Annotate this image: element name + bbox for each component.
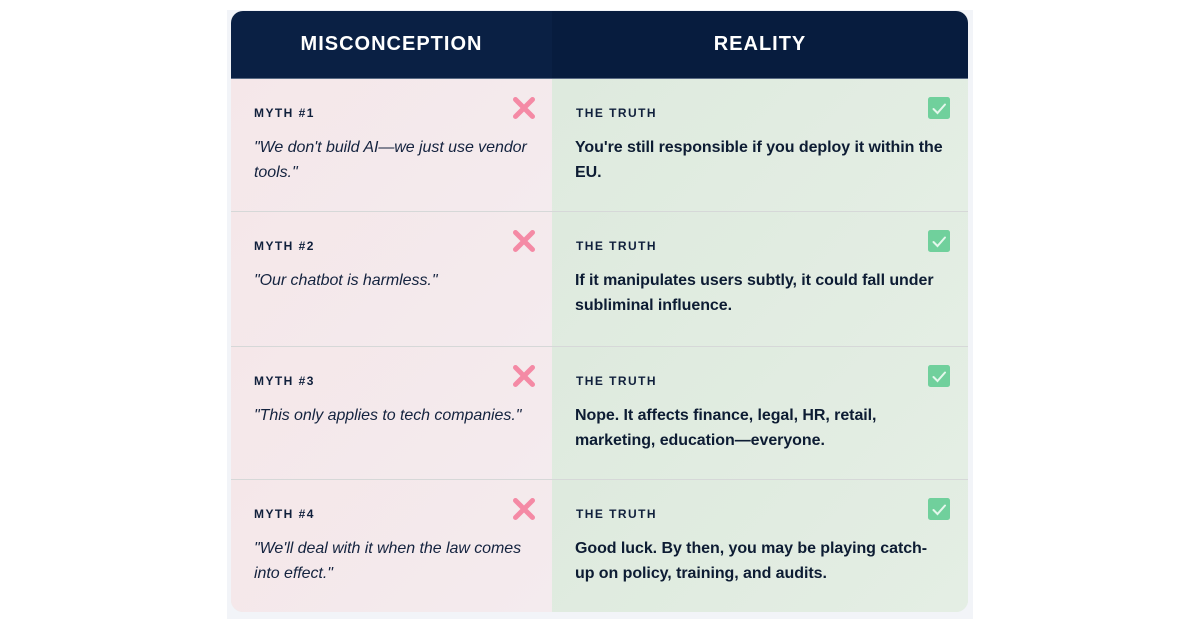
row 3 bbox=[231, 347, 968, 480]
heading: misconception: MISCONCEPTION bbox=[301, 33, 482, 55]
panel: myth 4 bbox=[231, 480, 552, 612]
myth label: MYTH #2 bbox=[254, 239, 315, 253]
icon: check bbox=[928, 230, 950, 252]
row 4 bbox=[231, 480, 950, 612]
truth text bbox=[575, 407, 876, 449]
truth text: Good luck. By then, you may be playing catch- bbox=[575, 540, 927, 557]
myth quote: "This only applies to tech companies." bbox=[254, 407, 521, 424]
header bar bbox=[231, 11, 968, 79]
page backdrop panel bbox=[227, 10, 973, 619]
truth label: THE TRUTH bbox=[576, 374, 657, 388]
comparison table bbox=[231, 11, 968, 612]
icon: check bbox=[928, 498, 950, 520]
panel: truth 2 bbox=[552, 212, 968, 347]
myth quote: "Our chatbot is harmless." bbox=[254, 272, 437, 289]
icon: cross bbox=[513, 97, 535, 119]
truth text: up on policy, training, and audits. bbox=[575, 565, 827, 582]
truth text: You're still responsible if you deploy it within the bbox=[575, 139, 943, 156]
icon: check bbox=[928, 97, 950, 119]
panel: truth 4 bbox=[552, 480, 968, 612]
myth quote bbox=[254, 139, 528, 181]
truth text: marketing, education—everyone. bbox=[575, 432, 825, 449]
truth text: EU. bbox=[575, 164, 602, 181]
truth text bbox=[575, 540, 927, 582]
truth text: subliminal influence. bbox=[575, 297, 732, 314]
heading: reality: REALITY bbox=[714, 33, 806, 55]
myth quote: "We don't build AI—we just use vendor bbox=[254, 139, 527, 156]
truth label: THE TRUTH bbox=[576, 507, 657, 521]
row 2 bbox=[231, 212, 968, 347]
myth label: MYTH #3 bbox=[254, 374, 315, 388]
truth text bbox=[575, 139, 943, 181]
panel: myth 1 bbox=[231, 79, 552, 212]
truth label: THE TRUTH bbox=[576, 239, 657, 253]
icon: cross bbox=[513, 230, 535, 252]
panel: myth 2 bbox=[231, 212, 552, 347]
myth quote: into effect." bbox=[254, 565, 333, 582]
myth quote: tools." bbox=[254, 164, 298, 181]
icon: cross bbox=[513, 498, 535, 520]
icon: cross bbox=[513, 365, 535, 387]
icon: check bbox=[928, 365, 950, 387]
panel: myth 3 bbox=[231, 347, 552, 480]
truth text bbox=[575, 272, 934, 314]
truth text: If it manipulates users subtly, it could fall under bbox=[575, 272, 933, 289]
myth label: MYTH #1 bbox=[254, 106, 315, 120]
myth quote bbox=[254, 540, 521, 582]
truth text: Nope. It affects finance, legal, HR, retail, bbox=[575, 407, 876, 424]
row 1 bbox=[231, 79, 968, 212]
myth label: MYTH #4 bbox=[254, 507, 315, 521]
panel: truth 3 bbox=[552, 347, 968, 480]
truth label: THE TRUTH bbox=[576, 106, 657, 120]
panel: truth 1 bbox=[552, 79, 968, 212]
myth quote: "We'll deal with it when the law comes bbox=[254, 540, 521, 557]
